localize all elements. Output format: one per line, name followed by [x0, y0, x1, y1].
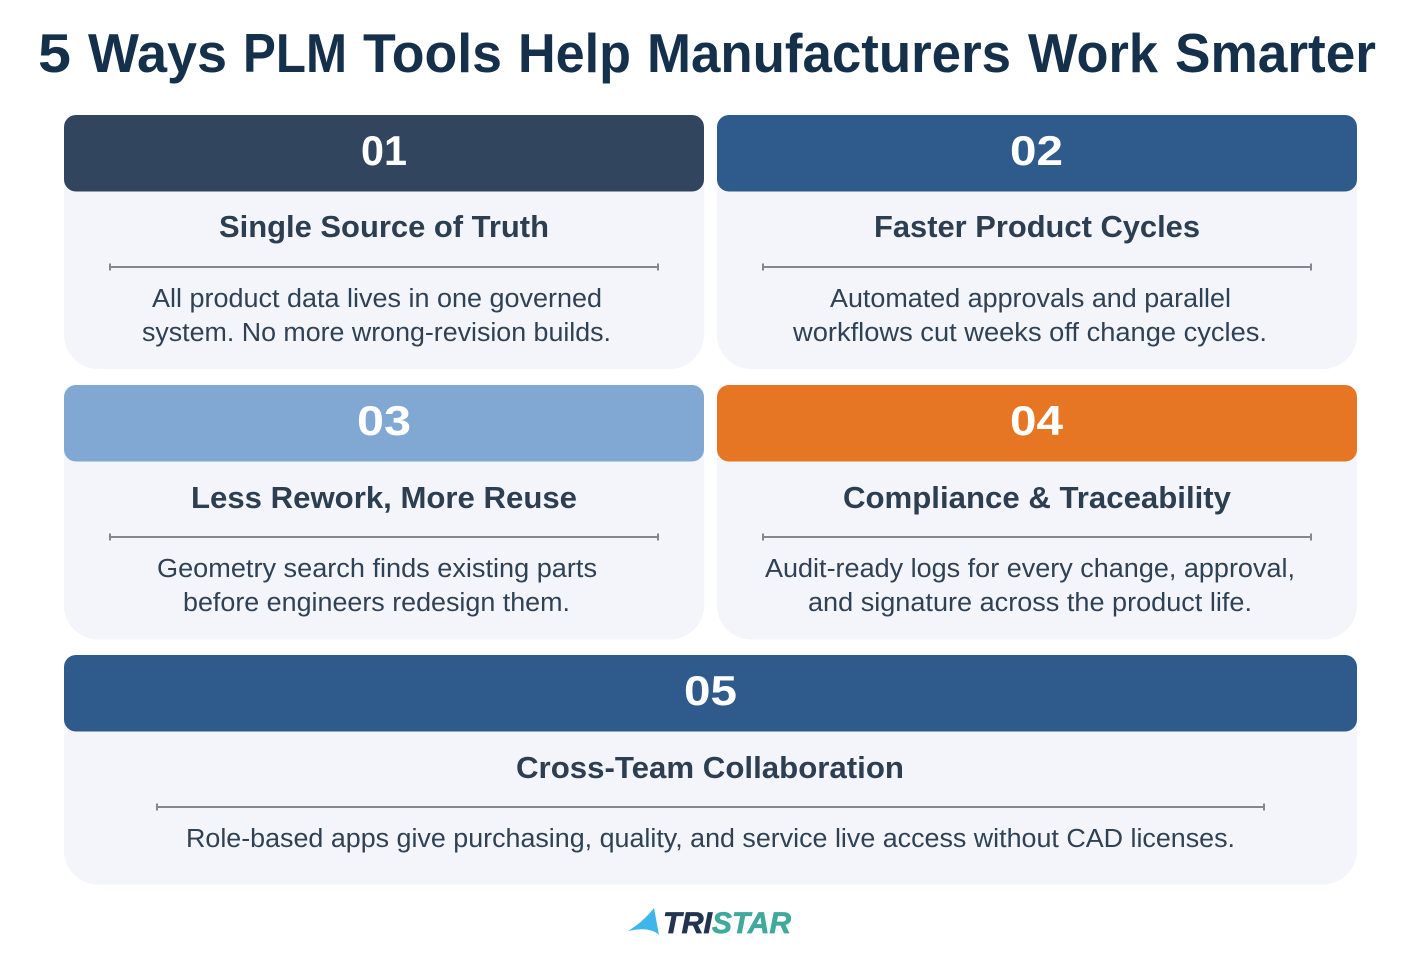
panel: 02 Faster Product Cycles [717, 115, 1357, 369]
title: Work [1028, 22, 1158, 84]
body text 01: All product data lives in one governed [152, 285, 602, 313]
number band 04 [717, 385, 1357, 462]
logo wordmark [663, 907, 791, 940]
body text 05: Role-based apps give purchasing, quality, and service live access without CAD licenses. [186, 825, 1235, 853]
heading: Less Rework, More Reuse: Less Rework, More Reuse [191, 481, 577, 515]
title [38, 22, 1376, 84]
heading: Compliance & Traceability: Compliance & Traceability [843, 481, 1231, 515]
number band 05: 05 [684, 667, 737, 714]
title: Ways [88, 22, 227, 84]
logo: TriStar [628, 907, 791, 940]
body text 02: Automated approvals and parallel [830, 285, 1231, 313]
number band 03: 03 [357, 397, 411, 444]
title: 5 [38, 22, 71, 84]
body text 03: Geometry search finds existing parts [157, 555, 597, 583]
body text 03: before engineers redesign them. [183, 589, 570, 617]
title: Tools [363, 22, 502, 84]
panel: 05 Cross-Team Collaboration [64, 655, 1357, 884]
number band 02 [717, 115, 1357, 192]
body text 01: system. No more wrong-revision builds. [142, 319, 611, 347]
body text 04: and signature across the product life. [808, 589, 1252, 617]
body text 04 [765, 555, 1295, 617]
title: Smarter [1175, 22, 1376, 84]
body text 03 [157, 555, 597, 617]
panel: 04 Compliance & Traceability [717, 385, 1357, 640]
logo wordmark: STAR [712, 907, 791, 940]
logo wordmark: TRI [663, 907, 713, 940]
number band 02: 02 [1010, 127, 1063, 174]
number band 04: 04 [1010, 397, 1064, 444]
body text 02 [792, 285, 1267, 347]
panel: 03 Less Rework, More Reuse [64, 385, 704, 640]
heading: Faster Product Cycles: Faster Product Cycles [874, 210, 1200, 244]
body text 02: workflows cut weeks off change cycles. [792, 319, 1267, 347]
title: Help [518, 22, 631, 84]
body text 04: Audit-ready logs for every change, approval, [765, 555, 1295, 583]
body text 01 [142, 285, 611, 347]
panel: 01 Single Source of Truth [64, 115, 704, 369]
title: PLM [243, 22, 347, 84]
number band 01 [64, 115, 704, 192]
number band 05 [64, 655, 1357, 732]
title: Manufacturers [647, 22, 1011, 84]
icon: logo arrow [628, 908, 659, 935]
number band 03 [64, 385, 704, 462]
heading: Single Source of Truth: Single Source of Truth [219, 210, 549, 244]
heading: Cross-Team Collaboration: Cross-Team Collaboration [516, 751, 904, 785]
number band 01: 01 [361, 127, 407, 174]
